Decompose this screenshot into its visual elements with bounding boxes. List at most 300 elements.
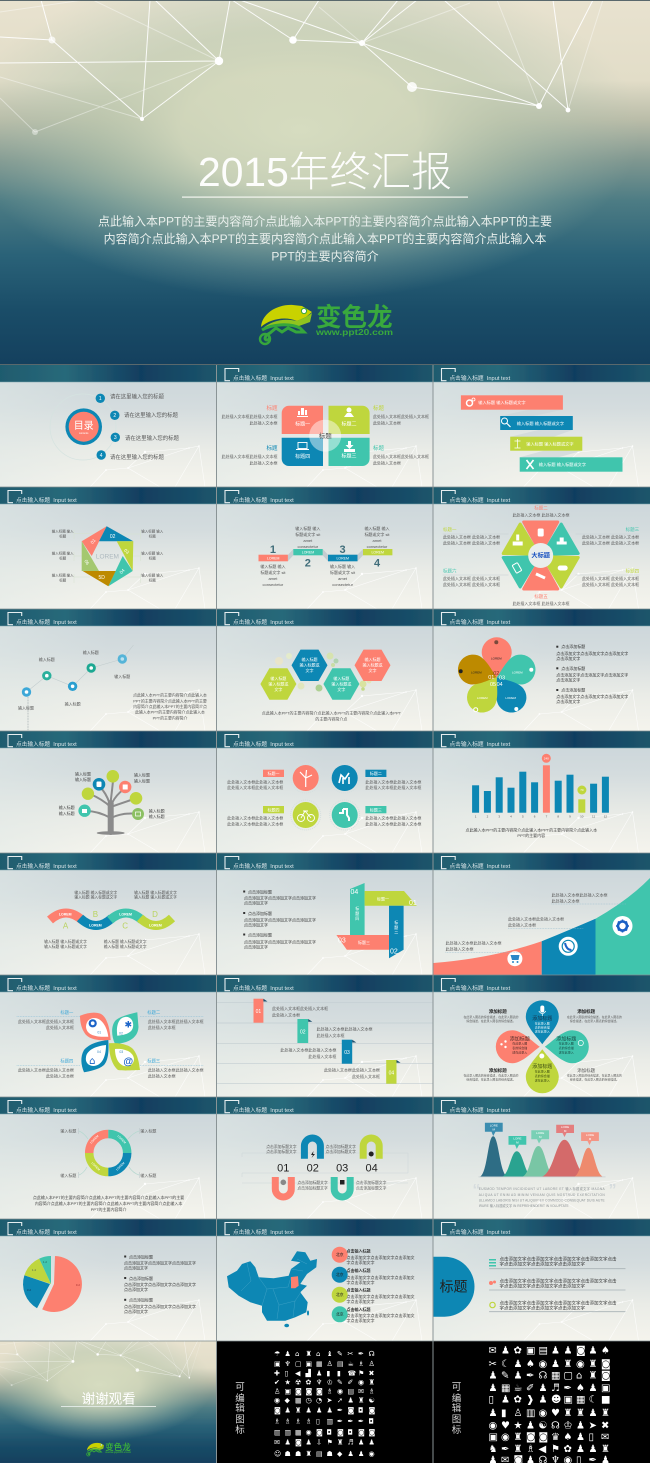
hexagon labels: 标题 [149, 577, 156, 582]
wave letters: B [93, 910, 98, 919]
slide: horseshoes: 点击输入标题 Input text [233, 1106, 294, 1114]
leaf captions: 此处插入文本框此处插入文本框 [148, 1018, 204, 1024]
step texts: 输入标题 输入 [330, 563, 355, 569]
bullet list: 点击添加标题 [561, 665, 585, 671]
step texts: amet [338, 576, 348, 581]
donut segment labels: LOREM [117, 1134, 127, 1145]
city descriptions: 点击输入标题 [346, 1286, 370, 1292]
left captions [227, 770, 284, 826]
leaf captions: 此处插入文本框此处插入文本框 [18, 1018, 74, 1024]
chart labels: 输入标题 [39, 656, 55, 662]
hexagon segments: 5D [98, 575, 105, 581]
ribbon labels [338, 889, 417, 956]
hexagon texts: 输入标题 [364, 656, 380, 662]
hexagon labels: 输入标题 输入 [141, 572, 164, 577]
donut caption: 点此输入本PPT的主要内容简介点此输入本PPT的主要内容简介点此输入本PPT的主要 [33, 1194, 184, 1200]
bullet list: 点击添加标题 [129, 1275, 153, 1281]
teardrop labels: 添加标题 [510, 1035, 530, 1042]
curve callouts [485, 1123, 599, 1149]
corner captions: 综合描述，在此录入图表的综合描述。 [570, 1076, 619, 1081]
left captions: 标题一 [268, 770, 280, 776]
left captions: 标题 [266, 444, 278, 452]
paragraph: 内容简介点此输入本PPT的主要内容简介点 [133, 704, 207, 709]
hexagon segments: 04 [119, 567, 126, 575]
vertical caption [235, 1382, 245, 1436]
icon grid: ♞✒♜♗◀⚑✿♟♟♜ [488, 1444, 610, 1455]
chart caption [466, 826, 597, 838]
slide: china map: 点击输入标题 Input text [233, 1228, 294, 1236]
wedge captions: 此处插入文本框 此处插入文本框 [512, 600, 570, 606]
slide: stepped ribbons: 点击输入标题 Input text [450, 374, 511, 382]
step texts: 标题或文字 sit [260, 569, 286, 575]
vertical caption: 可 [235, 1382, 245, 1393]
decorative small hexagons [275, 652, 372, 692]
staircase tabs: 04 [389, 1070, 394, 1076]
teardrop labels: 表的综合描 [535, 1024, 550, 1029]
teardrop labels: 添加标题 [532, 1015, 552, 1022]
bullet list: 点击添加文字 [244, 943, 268, 949]
value bubbles: 240 [544, 756, 549, 760]
curve callouts: M [539, 1135, 542, 1139]
petal labels: LOREM [505, 696, 517, 700]
bullet list: 点击添加文字 [556, 655, 580, 661]
city descriptions: 点击输入标题 [346, 1306, 370, 1312]
wedge captions: 此处插入文本框 此处插入文本框 [443, 534, 500, 540]
curve callouts: LORE [586, 1133, 594, 1137]
vertical caption: 图 [452, 1414, 461, 1426]
leaf icons: ⌂ [89, 1056, 95, 1067]
numbers: 01 [277, 1162, 289, 1174]
hexagon texts: 输入标题 [270, 675, 286, 681]
right captions: 标题三 [370, 806, 382, 812]
area segments [434, 878, 650, 975]
list dividers [489, 1269, 626, 1312]
bullet list: 点击添加文字 [124, 1308, 148, 1314]
ribbon labels: 标题一 [377, 896, 389, 902]
leaf captions: 此处插入文本框 [46, 1024, 74, 1030]
list texts: 点击添加文字点击添加文字点击添加文字点击添加文字点击 [500, 1300, 617, 1307]
hexagon labels: 输入标题 输入 [52, 551, 74, 556]
quadrant tiles [282, 406, 370, 466]
contents ring [50, 394, 116, 460]
wedge captions: 此处插入文本框 此处插入文本框 [582, 534, 639, 540]
city descriptions: 字点击添加文字 [346, 1259, 374, 1265]
area captions: 此处插入文本框此处插入文本框 [446, 940, 502, 946]
paragraph: PPT的主要内容简介 [153, 716, 188, 720]
quadrant icons and captions: 标题二 [341, 420, 357, 428]
slide: folded square ribbons [217, 853, 434, 975]
right captions: 此处插入文本框此处插入文本框 [365, 778, 421, 784]
hexagon texts: 输入标题或 [268, 680, 288, 686]
tree labels: 输入标题 [75, 770, 91, 776]
main hexagons [260, 650, 390, 700]
chart labels: 输入标题 [65, 700, 81, 706]
horseshoe icons [280, 1151, 374, 1185]
bullet list: 点击添加文字 [556, 676, 580, 682]
tree labels: 输入标题 [149, 808, 165, 814]
vertical caption: 标 [235, 1424, 245, 1436]
wedge captions: 标题六 [443, 568, 457, 574]
icon grid: ▣◉♜◙◙♛♠♟▯✉ [488, 1432, 609, 1443]
right captions [365, 770, 421, 826]
hexagon texts: 输入标题或 [331, 680, 351, 686]
step texts: 标题或文字 sit [295, 531, 321, 537]
wedge captions: 此处插入文本框 此处插入文本框 [512, 512, 570, 518]
icon grid [488, 1346, 611, 1463]
hexagon labels: 标题 [59, 556, 67, 561]
chart caption: PPT的主要内容 [517, 832, 545, 838]
leaf icons: ✱ [125, 1020, 132, 1030]
icon grid: ▥▥▦◉◙◘◙◘◙◙ [274, 1428, 376, 1436]
slide: tree diagram: 点击输入标题 Input text [16, 740, 77, 748]
icon grid: ♟▮♙▥◉♥♜♜♟♜ [488, 1408, 610, 1419]
teardrop labels: 在此录入图 [535, 1021, 550, 1026]
wave letters: C [122, 922, 128, 930]
leaf icons: 04 [97, 1050, 101, 1054]
horseshoe captions: 点击添加标题文字 [356, 1185, 387, 1190]
wave letters [63, 910, 158, 930]
staircase captions: 此处插入文本框此处插入文本框 [324, 1066, 380, 1072]
quadrant icons and captions: 标题一 [295, 420, 310, 428]
quoted paragraph: “ [472, 1182, 480, 1199]
step texts: consectetur [367, 544, 388, 549]
teardrop labels: 述在此录入 [535, 1077, 550, 1082]
horseshoe captions: 点击添加标题文字 [326, 1144, 356, 1149]
numbers: 02 [307, 1162, 319, 1174]
corner captions: 添加标题 [489, 1067, 507, 1074]
corner captions [464, 1008, 622, 1081]
ribbon labels: 01 [409, 900, 417, 907]
bell curves [478, 1136, 606, 1177]
slide: donut chart [0, 1097, 216, 1219]
quadrant icons and captions [295, 408, 357, 460]
hexagon texts: 输入标题 [333, 675, 349, 681]
area icons [507, 916, 632, 966]
contents list: 1 [99, 396, 102, 402]
ribbon steps: LOREM [267, 556, 280, 560]
slide: thank you [0, 1341, 217, 1463]
right captions: 标题二 [370, 770, 382, 776]
bullet list: 点击添加文字 [124, 1286, 148, 1292]
city descriptions: 点击添加文字点击添加文字点击添加文 [346, 1312, 414, 1318]
wave letters: A [63, 922, 69, 930]
step texts: 标题或文字 sit [364, 531, 390, 537]
grid lines [217, 1002, 433, 1084]
slide: four icon circles: 点击输入标题 Input text [233, 740, 294, 748]
icon grid: ▣♆▢▣▦♙▤☕♗♙ [274, 1360, 375, 1368]
hexagon texts: 输入标题或 [362, 662, 382, 668]
donut segment labels: LOREM [91, 1161, 101, 1172]
slide: wave steps [0, 853, 216, 975]
contents list: 请在这里输入您的标题 [110, 392, 165, 400]
chart labels: 输入标题 [18, 704, 34, 710]
petal labels: 05 [490, 682, 496, 688]
numbers [277, 1162, 378, 1174]
list texts [500, 1256, 617, 1311]
bar labels: 7 [546, 814, 548, 818]
teardrop labels: 表的综合描 [535, 1073, 550, 1078]
bullet list [556, 643, 628, 704]
ribbon shadows [500, 410, 582, 457]
horseshoes [275, 1138, 379, 1197]
slide: process ribbons: 点击输入标题 Input text [233, 496, 294, 504]
contents list [96, 392, 180, 461]
hexagon labels: 标题 [149, 556, 156, 561]
wave labels: LOREM [59, 912, 72, 916]
city badges: 北京 [336, 1311, 344, 1317]
hexagon labels: 输入标题 输入 [52, 572, 74, 577]
right captions: 此处插入文本框此处插入文本框 [365, 784, 421, 790]
bar labels: 2 [487, 814, 489, 818]
wave captions: 输入标题 输入标题或文字 [74, 895, 117, 900]
slide: four squares: 点击输入标题 Input text [233, 374, 294, 382]
staircase captions: 此处插入文本框此处插入文本框 [280, 1046, 336, 1052]
quadrant icons and captions: 标题三 [341, 452, 357, 460]
vertical caption: 编 [452, 1392, 461, 1404]
corner captions: 添加标题 [577, 1008, 596, 1015]
wave captions [44, 890, 177, 949]
donut callouts [60, 1128, 156, 1178]
hexagon labels: 标题 [149, 534, 156, 539]
leaf captions: 此处插入文本框 [46, 1072, 74, 1078]
ribbon labels: 二 [394, 930, 398, 935]
petal labels: LOREM [471, 670, 482, 674]
step numbers: 3 [340, 544, 346, 556]
slide: line chart [0, 609, 216, 731]
wedge captions: 此处插入文本框 此处插入文本框 [582, 581, 639, 587]
leaf titles: 标题一 [60, 1009, 74, 1016]
wave captions: 输入标题 输入标题或文字 [44, 939, 87, 944]
hexagon labels: 输入标题 输入 [141, 551, 164, 556]
bullet list: 点击添加文字点击添加文字点击添加文字 [244, 895, 316, 901]
horseshoe captions: 点击添加标题文字 [266, 1144, 297, 1149]
icon circles [291, 763, 360, 830]
city badges: 北京 [336, 1291, 344, 1297]
petal labels [459, 640, 533, 712]
contents list: 请在这里输入您的标题 [125, 434, 180, 442]
pie [23, 1256, 82, 1312]
icon grid: ◉♥★♟☯☊♔♟➤✖ [488, 1420, 609, 1432]
slide: folded square ribbons: 点击输入标题 Input text [233, 862, 294, 870]
tree labels: 输入标题 [59, 804, 75, 810]
hexagon segments [82, 526, 133, 586]
right captions [373, 404, 429, 466]
bullet list [124, 1253, 196, 1314]
corner captions: 综合描述，在此录入图表的综合描述。 [466, 1076, 516, 1081]
bar labels: 9 [569, 814, 571, 818]
leaf icons [89, 1020, 133, 1068]
leaf dotted lines [17, 1017, 204, 1065]
left captions: 标题四 [268, 806, 280, 812]
slide: line chart: 点击输入标题 Input text [16, 618, 77, 626]
quoted paragraph: EUSMOD TEMPOR INCIDIDUNT UT LABORE ET 输入标题或文字 MAGNA [479, 1186, 606, 1191]
slide: four squares [217, 365, 434, 487]
teardrop labels: 述在此录入 [535, 1029, 550, 1034]
ribbon labels: 02 [390, 948, 398, 956]
slide: tree diagram [0, 731, 216, 853]
right captions: 此处插入文本框此处插入文本框 [373, 453, 429, 459]
blue semicircle [434, 1257, 474, 1317]
bullet list: 点击添加标题 [248, 888, 272, 894]
value bubbles: 70 [580, 788, 584, 792]
ribbon steps [258, 549, 392, 561]
horseshoe captions: 点击添加标题文字 [356, 1180, 387, 1185]
hexagon texts: 文字 [337, 686, 345, 692]
bullet list: 点击添加标题 [561, 643, 585, 649]
city descriptions: 点击输入标题 [346, 1248, 370, 1254]
staircase captions: 此处插入文本框 [272, 1011, 300, 1017]
left captions: 此处插入文本框此处插入文本框 [227, 815, 283, 821]
petal labels: LOREM [491, 656, 502, 660]
leaf captions: 此处插入文本框此处插入文本框 [148, 1066, 204, 1072]
corner captions: 在此录入图表的综合描述，在此录入图表的 [464, 1072, 519, 1077]
vertical caption [452, 1382, 462, 1436]
step texts [260, 525, 390, 587]
chart labels: 输入标题 [114, 673, 130, 679]
donut callouts: 输入标题 [60, 1172, 76, 1178]
right captions: 此处插入文本框 [373, 460, 401, 466]
donut segment labels: LOREM [89, 1134, 100, 1144]
tree labels [59, 770, 165, 819]
area captions: 此处插入文本框 [552, 898, 580, 904]
slide: rising area chart: 点击输入标题 Input text [450, 862, 511, 870]
bar labels: 6 [534, 814, 536, 818]
left captions: 此处插入文本框此处插入文本框 [227, 820, 283, 826]
right captions: 此处插入文本框此处插入文本框 [365, 820, 421, 826]
connector lines [74, 530, 140, 583]
wave ribbons [50, 913, 172, 926]
pie: 1.4 [32, 1268, 36, 1272]
leaf tiles [80, 1012, 140, 1072]
wave captions: 输入标题 输入标题或文字 [134, 895, 177, 900]
numbers: 04 [365, 1162, 378, 1174]
right captions: 标题 [373, 404, 385, 412]
icon grid: ♟✎♟✒☊▦▢⌂♜◙ [488, 1370, 611, 1382]
cover subtitle text: PPT的主要内容简介 [271, 248, 379, 264]
step texts: amet [303, 538, 313, 543]
corner captions: 综合描述，在此录入图表的综合描述。 [466, 1018, 516, 1023]
ribbon labels: 03 [338, 938, 346, 944]
donut caption: PPT的主要内容简介 [91, 1206, 126, 1212]
corner captions: 综合描述，在此录入图表的综合描述。 [570, 1018, 619, 1023]
slide: staircase tabs: 点击输入标题 Input text [233, 984, 294, 992]
city descriptions: 点击添加文字点击添加文字点击添加文 [346, 1274, 414, 1280]
slide: four leaves: 点击输入标题 Input text [16, 984, 77, 992]
hexagon labels: 输入标题 输入 [141, 529, 164, 534]
bar labels [475, 814, 607, 818]
wedge captions [443, 504, 640, 606]
step texts: amet [268, 576, 278, 581]
caption: 的主要内容简介点 [315, 716, 347, 722]
ribbons: 输入标题 输入标题或文字 [478, 399, 526, 406]
petal labels: 04 [497, 682, 503, 688]
city descriptions: 字点击添加文字 [346, 1317, 374, 1323]
step texts: consectetur [332, 582, 354, 587]
horseshoe captions [266, 1144, 387, 1190]
bar labels: 10 [580, 814, 584, 818]
step numbers: 4 [374, 558, 381, 570]
value bubbles [542, 754, 586, 794]
staircase tabs: 01 [256, 1009, 261, 1015]
ribbon labels: 题 [355, 911, 359, 916]
icon grid: ✚▯◀▟♟▮▮☎⚑✖ [274, 1368, 374, 1377]
cover subtitle text: 内容简介点此输入本PPT的主要内容简介点此输入本PPT的主要内容简介点此输入本 [104, 231, 546, 246]
donut callouts: 输入标题 [140, 1128, 156, 1134]
wave labels: LOREM [119, 912, 132, 916]
slide: pie chart: 点击输入标题 Input text [16, 1228, 77, 1236]
bullet list: 点击添加文字点击添加文字点击添加文字 [244, 938, 316, 944]
contents list: 请在这里输入您的标题 [110, 453, 165, 461]
list texts: 字点击添加文字点击添加文字点击添加文字 [500, 1304, 585, 1311]
city descriptions: 点击添加文字点击添加文字点击添加文 [346, 1254, 414, 1260]
tree labels: 输入标题 [75, 776, 91, 782]
dotted drop line [27, 697, 29, 731]
cover title: 2015年终汇报 [198, 149, 452, 195]
bullet list: 点击添加标题 [129, 1297, 153, 1303]
leaf icons: @ [123, 1056, 133, 1068]
leaf icons: 03 [119, 1050, 123, 1054]
city descriptions: 字点击添加文字 [346, 1279, 374, 1285]
area captions: 此处插入文本框 [508, 922, 536, 928]
ribbon connectors [288, 549, 363, 561]
tree leaves [78, 770, 144, 820]
step texts: 输入标题 输入 [260, 563, 285, 569]
list texts: 点击添加文字点击添加文字点击添加文字点击添加文字点击 [500, 1278, 617, 1285]
slide: four teardrops: 点击输入标题 Input text [450, 984, 511, 992]
teardrops [496, 1000, 589, 1093]
curve callouts: LORE [561, 1125, 569, 1129]
staircase captions: 此处插入文本框此处插入文本框 [316, 1026, 372, 1032]
city descriptions: 点击添加文字点击添加文字点击添加文 [346, 1293, 414, 1299]
paragraph [133, 692, 207, 720]
corner captions: 在此录入图表的综合描述，在此录入图表的 [567, 1014, 622, 1019]
leaf icons: 01 [97, 1030, 101, 1034]
ribbon icons [466, 398, 534, 469]
curve callouts: M [516, 1140, 519, 1144]
step numbers: 1 [270, 544, 276, 556]
vertical caption: 标 [452, 1424, 462, 1436]
frame lines [242, 1153, 408, 1183]
horseshoe captions: 点击添加标题文字 [297, 1180, 328, 1185]
hexagon labels [52, 529, 164, 582]
right captions: 此处插入文本框 [373, 420, 401, 426]
wave letters: D [152, 910, 158, 919]
left captions [222, 404, 278, 466]
curve callouts: M [564, 1129, 567, 1133]
step texts: 输入标题 输入 [295, 525, 320, 531]
horseshoe captions: 点击添加标题文字 [297, 1185, 328, 1190]
slide: process ribbons [217, 487, 434, 609]
donut caption [33, 1194, 184, 1212]
tree trunk [86, 781, 138, 835]
city descriptions: 字点击添加文字 [346, 1298, 374, 1304]
icon grid: ♙▣◙◙◙♗◉▤✉♗ [274, 1388, 375, 1396]
ribbon labels: 标题三 [358, 939, 370, 945]
tree labels: 输入标题 [149, 813, 165, 819]
leaf titles: 标题二 [147, 1009, 161, 1016]
wedge captions: 标题四 [626, 568, 640, 574]
caption: 点此输入本PPT的主要内容简介点此输入本PPT的主要内容简介点此输入本PPT [262, 710, 402, 716]
ribbon labels: 题 [394, 925, 398, 930]
bullet list: 点击添加文字 [244, 900, 268, 906]
city descriptions [346, 1248, 414, 1323]
bullet list: 点击添加文字点击添加文字点击添加文字 [556, 693, 628, 699]
blue semicircle: 标题 [440, 1278, 468, 1294]
hexagon wedges [503, 522, 578, 589]
icon grid: ◙♟♜♟♟♟✒◙◘◙ [274, 1407, 376, 1415]
petals [454, 637, 539, 718]
hexagon segments: 02 [110, 534, 116, 540]
